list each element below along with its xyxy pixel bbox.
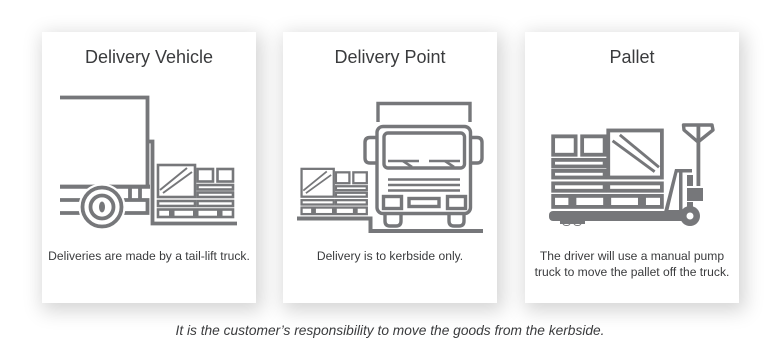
caption: manual pump truck: [534, 249, 729, 279]
footer note: It is the customer’s responsibility to move the goods from the kerbside.: [176, 322, 604, 338]
heading: delivery point: Delivery Point: [334, 47, 446, 67]
icon: pallet on manual pump truck: [549, 123, 715, 226]
heading: pallet: Pallet: [609, 47, 655, 67]
icon: tail-lift truck with pallet: [60, 96, 237, 228]
caption: kerbside delivery: Delivery is to kerbside only.: [317, 249, 463, 263]
caption: manual pump truck: The driver will use a manual pump: [540, 249, 724, 263]
caption: tail-lift truck: Deliveries are made by a tail-lift truck.: [48, 249, 250, 263]
caption: manual pump truck: truck to move the pallet off the truck.: [535, 265, 729, 279]
panel: delivery point: [283, 32, 497, 303]
panel: pallet: [525, 32, 739, 303]
heading: delivery vehicle: Delivery Vehicle: [85, 47, 213, 67]
icon: truck at kerbside with pallet: [297, 102, 484, 233]
panel: delivery vehicle: [42, 32, 256, 303]
